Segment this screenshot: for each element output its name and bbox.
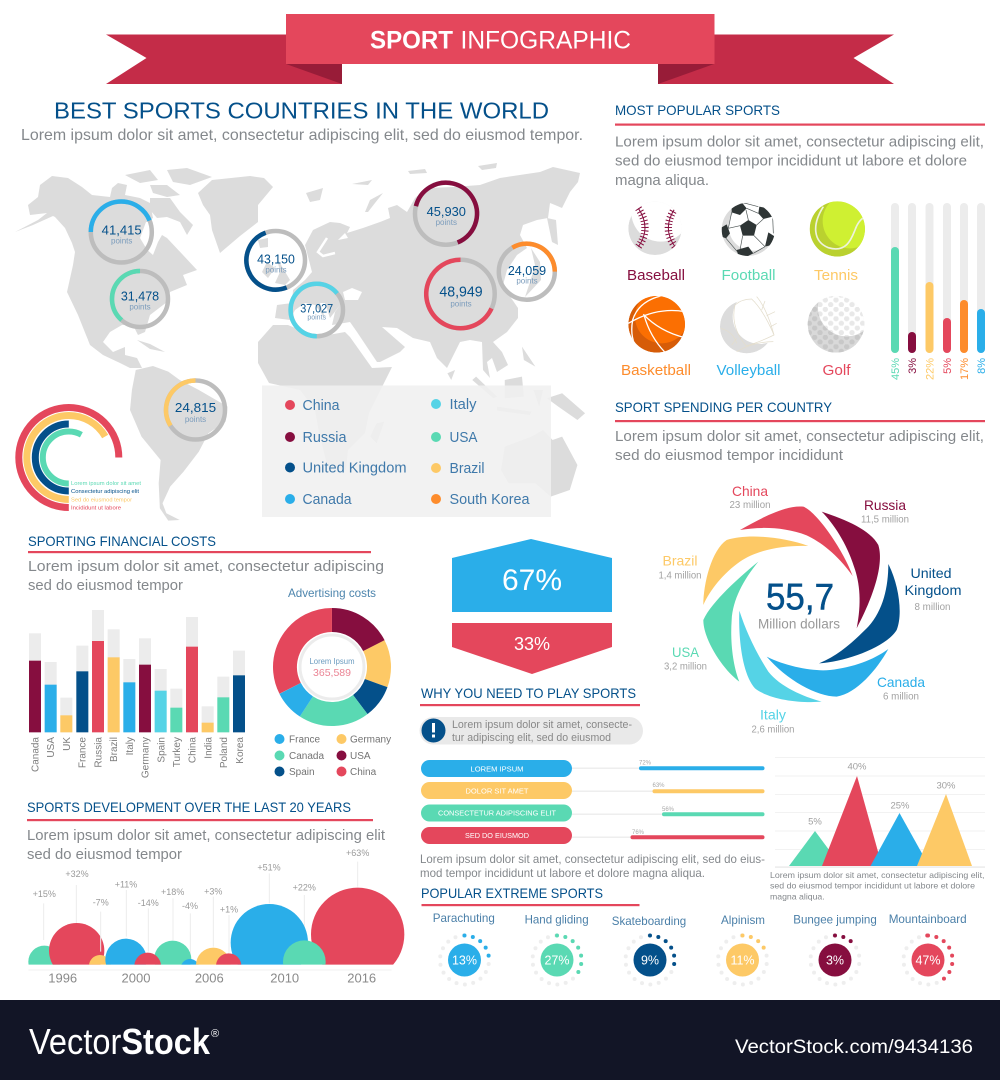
ring: usa 31,478: 31,478 [121, 289, 159, 304]
footer url: VectorStock.com/9434136 [735, 1037, 973, 1058]
gauge: parachuting: 13% [452, 954, 477, 968]
icon: basketball [628, 296, 685, 353]
percentage shield: 67% [502, 564, 562, 597]
heading: SPORT SPENDING PER COUNTRY [615, 399, 833, 415]
rosette label usa: 3,2 million [664, 660, 707, 672]
icon: volleyball [720, 296, 777, 354]
bar sed do eiusmod: 76% [632, 830, 645, 836]
legend item china: China [302, 397, 340, 414]
rosette label united kingdom: United [910, 565, 952, 581]
rosette label italy: 2,6 million [752, 724, 795, 736]
ring: canada 41,415: points [111, 237, 132, 246]
section: sporting financial costs [28, 533, 384, 594]
bar percentages: 45% [890, 358, 902, 380]
registered mark: ® [211, 1028, 219, 1040]
ring: canada 41,415: 41,415 [102, 222, 142, 237]
donut chart [266, 586, 398, 778]
gauge: bungee jumping: Bungee jumping [793, 912, 877, 926]
ring: brazil 24,815: 24,815 [175, 400, 216, 415]
footer bar [0, 1000, 1000, 1080]
rosette label china: 23 million [730, 499, 771, 511]
rosette label usa: USA [672, 644, 700, 660]
year axis [48, 971, 376, 986]
year axis: 2006 [195, 971, 224, 986]
bar labels: Poland [219, 737, 230, 768]
bar labels: Brazil [109, 737, 120, 762]
bar percentages [890, 358, 988, 380]
main heading: BEST SPORTS COUNTRIES IN THE WORLD [54, 98, 549, 124]
ring: china 48,949: points [450, 300, 472, 309]
bar labels: Turkey [172, 737, 183, 767]
gauge: hand gliding: 27% [544, 954, 570, 968]
rosette label brazil: 1,4 million [658, 570, 702, 582]
rosette centre value: 55,7 [766, 576, 834, 618]
popularity bars [890, 203, 988, 380]
ring: usa 31,478: points [129, 303, 151, 312]
triangle chart: 5% [808, 816, 822, 828]
rosette label canada: Canada [877, 674, 925, 690]
banner [106, 14, 894, 84]
gauge: alpinism: 11% [730, 954, 755, 968]
petal uk [819, 564, 900, 663]
bubble labels [33, 848, 369, 915]
bubble labels: +18% [161, 887, 184, 897]
ring: china 48,949 [415, 249, 506, 339]
inland waters [75, 222, 362, 340]
bar sed do eiusmod [421, 827, 764, 844]
petal brazil [703, 537, 808, 605]
donut legend: USA [350, 751, 371, 762]
year axis: 1996 [48, 971, 77, 986]
legend item brazil [431, 460, 484, 477]
triangle chart: 40% [847, 762, 867, 772]
paragraph: Lorem ipsum dolor sit amet, consectetur adipiscing elit [27, 828, 385, 844]
icon: baseball [628, 206, 681, 255]
gauge: hand gliding: Hand gliding [525, 912, 589, 926]
sport names: Tennis [814, 267, 858, 284]
section: sport spending per country [615, 399, 985, 464]
arc chart labels: Consectetur adipiscing elit [71, 489, 139, 495]
sport names: Golf [822, 362, 851, 379]
bar percentages: 8% [976, 358, 988, 374]
bar labels: Italy [125, 737, 136, 755]
ring: china 48,949: 48,949 [439, 284, 483, 301]
section: why you need to play sports [420, 685, 643, 744]
gauge: hand gliding [525, 912, 589, 984]
legend item russia: Russia [302, 429, 347, 446]
bubble labels: +3% [204, 886, 222, 896]
banner title: SPORT [370, 26, 453, 54]
bubble labels: +15% [33, 889, 56, 899]
percentage shield [452, 539, 612, 674]
triangle 25 percent [870, 813, 929, 866]
bar labels: Spain [156, 737, 168, 763]
triangle chart: 30% [936, 780, 956, 792]
donut title: Advertising costs [288, 586, 376, 600]
rosette label italy [752, 706, 795, 736]
triangle chart [775, 757, 985, 868]
right fold [658, 64, 714, 84]
bar percentages: 5% [942, 358, 954, 374]
arctic islands [125, 168, 212, 352]
gauge: parachuting: Parachuting [433, 911, 495, 925]
donut centre text: 365,589 [313, 667, 351, 679]
rosette chart [703, 507, 900, 702]
donut legend: Spain [289, 767, 315, 778]
legend item usa [431, 429, 478, 446]
bubble labels: -14% [138, 898, 159, 908]
ring: uk 43,150: points [265, 265, 287, 274]
bar labels [30, 737, 246, 778]
bar labels: China [188, 737, 198, 763]
bubble labels: +51% [257, 863, 281, 873]
gauge: bungee jumping [793, 912, 877, 984]
heading: WHY YOU NEED TO PLAY SPORTS [421, 685, 636, 701]
triangle 40 percent [822, 776, 882, 866]
paragraph: sed do eiusmod tempor incididunt [615, 448, 843, 464]
main subtitle: Lorem ipsum dolor sit amet, consectetur adipiscing elit, sed do eiusmod tempor. [21, 127, 583, 144]
bar lorem ipsum: LOREM IPSUM [470, 764, 524, 774]
paragraph [27, 828, 385, 863]
arc chart labels [71, 481, 141, 512]
rosette centre caption: Million dollars [758, 616, 840, 632]
bar labels: Korea [235, 737, 246, 764]
donut centre text [310, 657, 355, 679]
gauge: skateboarding: Skateboarding [612, 914, 686, 928]
bubble labels: +11% [115, 880, 137, 890]
sport names [621, 267, 858, 379]
year axis: 2010 [270, 971, 299, 986]
rosette label united kingdom: 8 million [914, 601, 951, 613]
gauge: alpinism [718, 913, 767, 984]
japan and korea [525, 218, 558, 297]
banner title: INFOGRAPHIC [460, 26, 631, 54]
bar labels: Canada [30, 737, 42, 772]
ring: italy 37,027 [291, 284, 343, 336]
bar percentages: 17% [959, 358, 971, 380]
rosette label china [730, 483, 771, 511]
gauge: mountainboard: Mountainboard [889, 912, 967, 926]
gauge: mountainboard [889, 912, 967, 984]
paragraph: Lorem ipsum dolor sit amet, consectetur adipiscing [28, 559, 384, 575]
sport names: Basketball [621, 362, 691, 379]
left ribbon tail [106, 34, 342, 84]
rosette label brazil [658, 552, 702, 582]
ring: uk 43,150: 43,150 [257, 252, 295, 267]
triangle chart: 25% [890, 800, 910, 812]
banner band [286, 14, 714, 64]
bubble labels: +63% [346, 848, 369, 858]
bar lorem ipsum: 72% [639, 760, 652, 766]
banner title [370, 26, 631, 54]
ring: usa 31,478 [100, 259, 180, 339]
north america [15, 176, 197, 368]
horizontal progress bars [421, 760, 764, 844]
british isles and iceland [258, 238, 290, 285]
rosette label united kingdom: Kingdom [904, 582, 962, 598]
triangle chart caption: magna aliqua. [770, 891, 825, 901]
bar dolor sit amet: 63% [652, 783, 665, 789]
gauge: parachuting [433, 911, 495, 984]
bar sed do eiusmod: SED DO EIUSMOD [465, 831, 530, 840]
gauge: bungee jumping: 3% [826, 954, 844, 968]
bubble chart [28, 848, 404, 986]
paragraph: sed do eiusmod tempor [27, 847, 182, 863]
heading: MOST POPULAR SPORTS [615, 102, 780, 118]
notice pill: tur adipiscing elit, sed do eiusmod [452, 732, 611, 744]
paragraph: magna aliqua. [615, 173, 709, 189]
donut centre text: Lorem Ipsum [310, 657, 355, 666]
rosette label russia: 11,5 million [861, 514, 909, 526]
arc chart labels: Sed do eiusmod tempor [71, 498, 132, 504]
paragraph [28, 559, 384, 594]
bar percentages: 22% [924, 358, 936, 380]
bar percentages: 3% [907, 358, 919, 374]
bubble labels: -4% [182, 901, 198, 911]
arc chart labels: Lorem ipsum dolor sit amet [71, 481, 141, 487]
rosette label canada: 6 million [883, 690, 919, 702]
heading: POPULAR EXTREME SPORTS [421, 885, 603, 901]
paragraph: Lorem ipsum dolor sit amet, consectetur adipiscing elit, [615, 134, 984, 150]
paragraph: sed do eiusmod tempor incididunt ut labore et dolore [615, 154, 967, 170]
bar dolor sit amet [421, 782, 764, 799]
world map [15, 163, 585, 521]
ball icons [628, 201, 865, 354]
notice pill: Lorem ipsum dolor sit amet, consecte- [452, 719, 632, 731]
bubble labels: -7% [93, 898, 109, 908]
ring: russia 45,930: points [436, 218, 457, 227]
rosette label russia [861, 497, 909, 526]
legend item brazil: Brazil [450, 460, 484, 477]
percentage shield: 33% [514, 634, 550, 654]
north sea islands [306, 163, 497, 212]
legend item italy: Italy [450, 396, 477, 413]
paragraph [615, 429, 984, 464]
ring: brazil 24,815: points [185, 415, 206, 424]
rosette label united kingdom [904, 565, 962, 613]
donut legend: Canada [289, 751, 324, 762]
heading: SPORTING FINANCIAL COSTS [28, 533, 216, 549]
legend item usa: USA [450, 429, 478, 446]
icon: golf ball [808, 296, 864, 352]
triangle chart caption [770, 870, 984, 901]
year axis: 2000 [122, 971, 150, 986]
donut legend [274, 734, 391, 778]
bubble labels: +32% [65, 869, 89, 879]
triangle 5 percent [789, 831, 841, 866]
donut legend: Germany [350, 734, 391, 746]
triangle 30 percent [917, 794, 972, 866]
legend item canada: Canada [302, 491, 352, 508]
ring: south korea 24,059 [488, 233, 565, 310]
sport names: Football [722, 267, 776, 284]
arc chart labels: Incididunt ut labore [71, 506, 121, 512]
bubble labels: +1% [220, 905, 238, 915]
bar labels: Germany [140, 737, 152, 778]
legend item italy [431, 396, 477, 413]
section: most popular sports [615, 102, 985, 189]
bubble labels: +22% [293, 883, 316, 893]
year axis: 2016 [347, 971, 376, 986]
notice pill [420, 717, 643, 744]
gauge: skateboarding: 9% [641, 954, 659, 968]
67 percent hexagon [452, 539, 612, 612]
legend panel [262, 386, 551, 517]
bar lorem ipsum [421, 760, 764, 777]
paragraph [615, 134, 984, 189]
petal china [740, 507, 853, 576]
bar labels: India [204, 737, 214, 759]
ring: russia 45,930 [408, 176, 484, 251]
legend item uk: United Kingdom [302, 460, 406, 476]
gauge: alpinism: Alpinism [721, 913, 765, 927]
bar consectetur: 56% [662, 807, 675, 813]
bar labels: Russia [94, 737, 104, 768]
bar consectetur [421, 804, 764, 822]
paragraph: why sports: mod tempor incididunt ut labore et dolore magna aliqua. [420, 866, 705, 880]
bar labels: USA [46, 737, 57, 758]
heading: SPORTS DEVELOPMENT OVER THE LAST 20 YEARS [27, 799, 351, 815]
ring: south korea 24,059: points [516, 277, 538, 286]
africa [258, 325, 392, 470]
paragraph: Lorem ipsum dolor sit amet, consectetur adipiscing elit, [615, 429, 984, 445]
greenland [198, 176, 273, 253]
south america [130, 366, 228, 521]
ring: italy 37,027: points [307, 315, 327, 322]
petal russia [822, 512, 880, 628]
eurasia [275, 167, 580, 378]
rosette label italy: Italy [760, 706, 786, 722]
icon: exclamation [422, 718, 446, 742]
paragraph: why sports [420, 852, 765, 880]
33 percent pennant [452, 623, 612, 674]
sport names: Baseball [627, 267, 685, 284]
ring: italy 37,027: 37,027 [300, 303, 333, 315]
paragraph: sed do eiusmod tempor [28, 578, 183, 594]
rosette label usa [664, 644, 707, 672]
right ribbon tail [658, 34, 894, 84]
petal usa [703, 562, 758, 682]
bar labels: UK [62, 737, 73, 751]
left fold [286, 64, 342, 84]
donut legend: China [350, 767, 377, 778]
bar dolor sit amet: DOLOR SIT AMET [466, 786, 529, 796]
icon: tennis ball [810, 201, 865, 257]
ring: brazil 24,815 [155, 369, 236, 451]
legend item china [285, 397, 340, 414]
rosette label brazil: Brazil [662, 552, 698, 568]
ring: uk 43,150 [238, 222, 314, 298]
gauge: skateboarding [612, 914, 686, 984]
ring: south korea 24,059: 24,059 [508, 263, 546, 278]
paragraph: why sports: Lorem ipsum dolor sit amet, consectetur adipiscing elit, sed do eius- [420, 852, 765, 866]
gauge: mountainboard: 47% [915, 954, 941, 968]
radial arc chart [19, 408, 141, 512]
petal canada [767, 649, 888, 697]
rosette label russia: Russia [864, 497, 906, 513]
asia pacific islands and australia [370, 347, 585, 497]
icon: football [722, 202, 777, 257]
ring: russia 45,930: 45,930 [427, 204, 466, 219]
rosette label china: China [732, 483, 768, 499]
section: sports development [27, 799, 385, 863]
bar labels: France [78, 737, 88, 768]
sport names: Volleyball [716, 362, 780, 379]
triangle chart caption: sed do eiusmod tempor incididunt ut labore et dolore [770, 881, 975, 891]
footer logo: VectorStock [29, 1021, 211, 1062]
donut legend: France [289, 734, 321, 746]
triangle chart caption: Lorem ipsum dolor sit amet, consectetur adipiscing elit, [770, 870, 984, 880]
rosette label canada [877, 674, 925, 702]
legend item south korea: South Korea [450, 491, 530, 508]
ring: canada 41,415 [91, 202, 152, 262]
bar chart [29, 610, 246, 778]
petal italy [739, 611, 822, 702]
bar consectetur: CONSECTETUR ADIPISCING ELIT [438, 808, 556, 818]
